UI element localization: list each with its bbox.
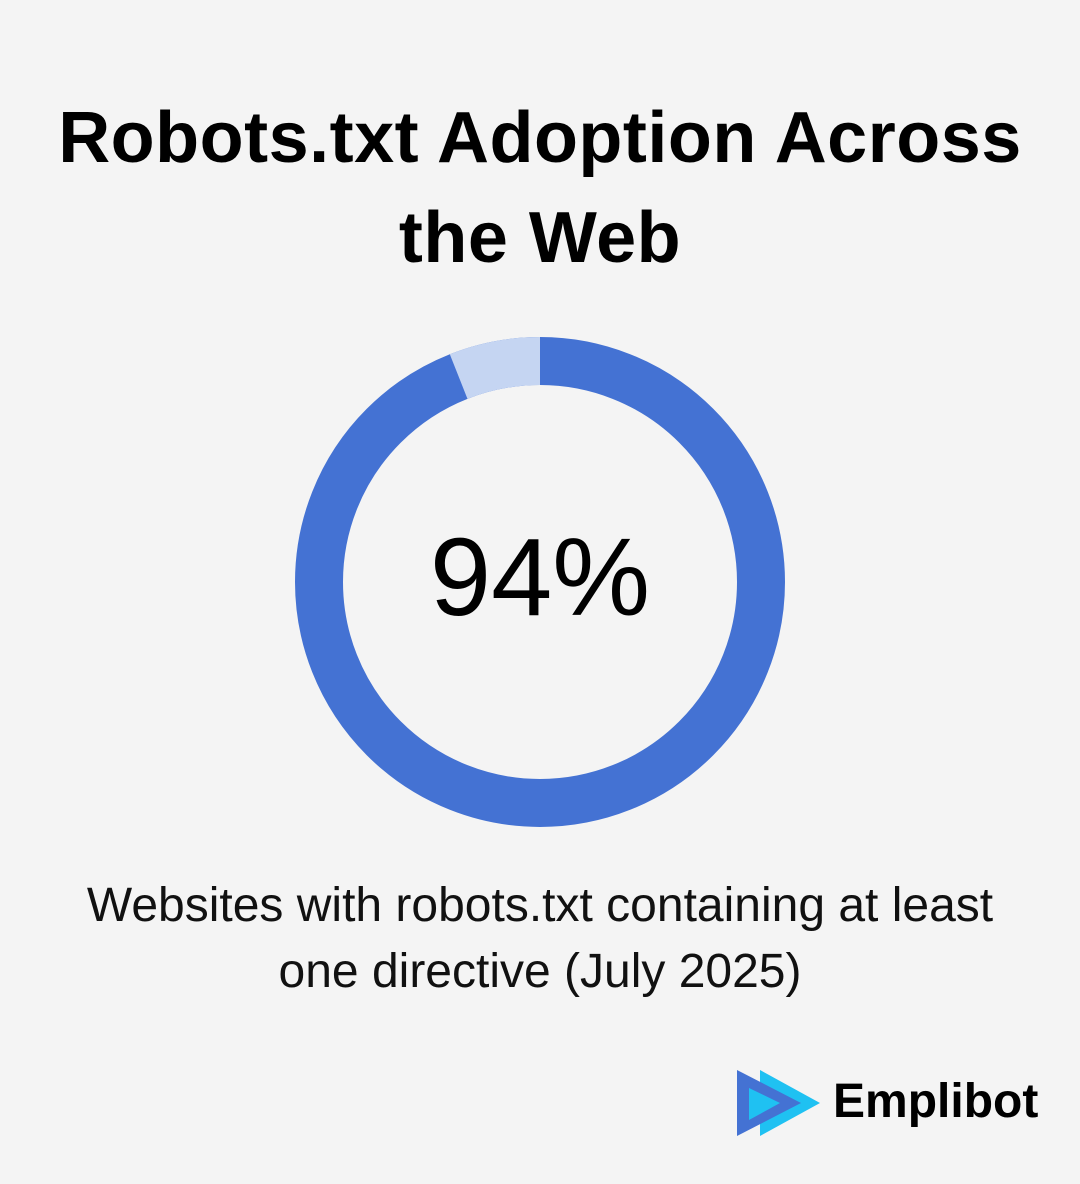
title: the Web	[399, 198, 681, 278]
brand name: Emplibot	[833, 1075, 1038, 1128]
icon: play triangles	[737, 1070, 820, 1136]
title: Robots.txt Adoption Across	[58, 98, 1022, 178]
subtitle	[87, 879, 993, 998]
subtitle: Websites with robots.txt containing at least	[87, 879, 993, 932]
donut chart: 94%	[430, 516, 650, 639]
title	[58, 98, 1022, 278]
logo	[737, 1070, 1038, 1136]
subtitle: one directive (July 2025)	[279, 945, 801, 998]
